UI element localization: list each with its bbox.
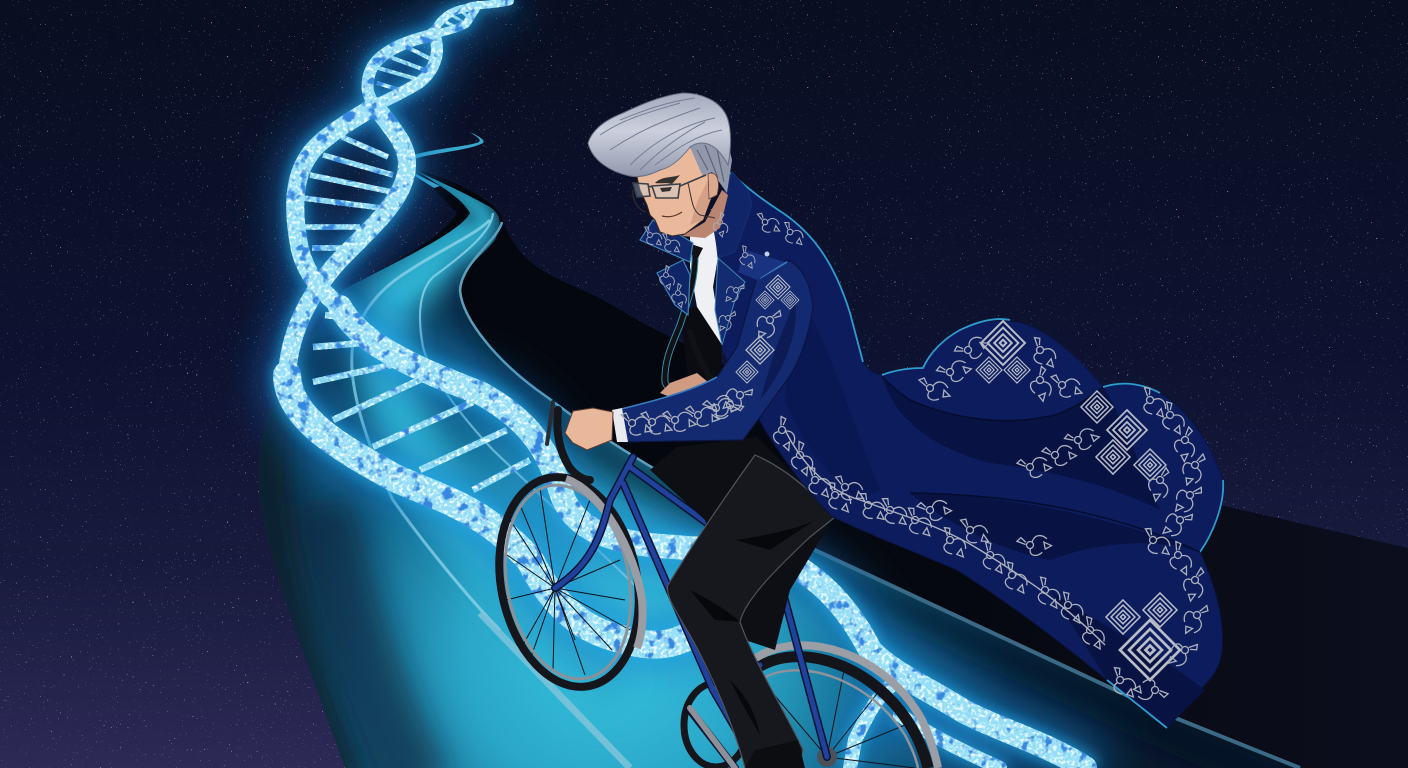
coat fold shadows xyxy=(882,376,1205,728)
sleeve fold xyxy=(760,300,796,400)
brake lever xyxy=(547,402,553,444)
bicycle frame xyxy=(547,402,827,768)
road lower left shadow xyxy=(320,500,420,768)
pompadour hair xyxy=(588,93,730,177)
road edge stripe lower xyxy=(800,543,1300,768)
frame tubes xyxy=(555,457,827,757)
DNA near glow xyxy=(287,1,1085,768)
hem vine motif xyxy=(766,415,1112,652)
dark hillside xyxy=(258,167,1408,768)
mouth xyxy=(662,212,682,217)
road bright lane xyxy=(384,225,620,700)
glowing road xyxy=(258,132,1300,768)
rear wheel spokes xyxy=(770,665,915,768)
chainring xyxy=(684,683,748,767)
rear tyre xyxy=(757,657,928,768)
front fender xyxy=(566,479,643,648)
coat tail and body xyxy=(718,173,1223,728)
glasses xyxy=(633,175,706,198)
back leg xyxy=(650,437,835,650)
trouser folds xyxy=(690,520,815,735)
DNA strands xyxy=(287,1,1085,768)
road upper lane glow xyxy=(395,175,487,298)
shirt xyxy=(690,225,722,345)
coat body fold xyxy=(785,290,880,500)
right lapel xyxy=(715,258,745,345)
face shadow xyxy=(690,180,713,225)
rear rim xyxy=(760,670,918,768)
face xyxy=(637,147,713,236)
left collar xyxy=(640,220,693,262)
second hand xyxy=(660,373,714,397)
ear xyxy=(708,173,718,199)
road shadow along the right edge xyxy=(474,265,1300,768)
frame outline xyxy=(555,457,827,768)
sleeve motif xyxy=(621,275,799,435)
coat lobe dividers xyxy=(882,376,1200,552)
sleeve xyxy=(612,250,813,442)
road lane line left xyxy=(352,220,500,630)
front tyre xyxy=(482,465,656,699)
glasses cord xyxy=(633,183,715,218)
front wheel xyxy=(482,465,656,699)
eyebrow and eye xyxy=(655,175,680,192)
side hair xyxy=(690,130,732,193)
hair strands xyxy=(600,98,722,170)
lower lobe motif xyxy=(1104,527,1209,706)
right collar xyxy=(714,172,752,258)
front rim xyxy=(489,474,647,690)
rear wheel lower spokes and chainring xyxy=(684,645,938,768)
epaulette button xyxy=(764,252,770,256)
cuff xyxy=(612,408,628,442)
side hair streaks xyxy=(697,140,724,182)
silver embroidery on the coat xyxy=(621,212,1209,706)
road edge line right xyxy=(460,222,800,543)
coat collar and lapels xyxy=(640,172,752,345)
top lobe motif xyxy=(919,321,1082,403)
rear fender xyxy=(756,645,938,768)
front leg xyxy=(667,455,835,768)
road shadow on the left shoulder xyxy=(267,320,345,768)
front wheel spokes xyxy=(506,488,630,675)
collar and lapel motifs xyxy=(640,212,808,333)
DNA double helix xyxy=(287,1,1085,768)
middle lobe motif xyxy=(1016,386,1205,542)
road lane line centre xyxy=(420,213,640,590)
crank arm xyxy=(690,708,735,768)
shoulder epaulette xyxy=(738,250,785,280)
hand on handlebar xyxy=(565,408,613,450)
handlebar xyxy=(557,410,590,480)
waistcoat shadow xyxy=(680,307,722,395)
DNA outer glow xyxy=(287,1,1085,768)
head xyxy=(588,93,732,238)
left lapel xyxy=(657,260,690,315)
sleeve highlight xyxy=(617,262,787,410)
shoe xyxy=(745,740,805,768)
necktie xyxy=(665,244,716,395)
road surface xyxy=(258,167,1300,768)
coat rim highlight xyxy=(730,173,1223,728)
road tail far away xyxy=(406,132,484,188)
DNA rungs xyxy=(303,8,530,490)
neck xyxy=(682,190,728,238)
rear hub xyxy=(817,747,837,767)
wide pale lane stripe xyxy=(480,613,630,768)
